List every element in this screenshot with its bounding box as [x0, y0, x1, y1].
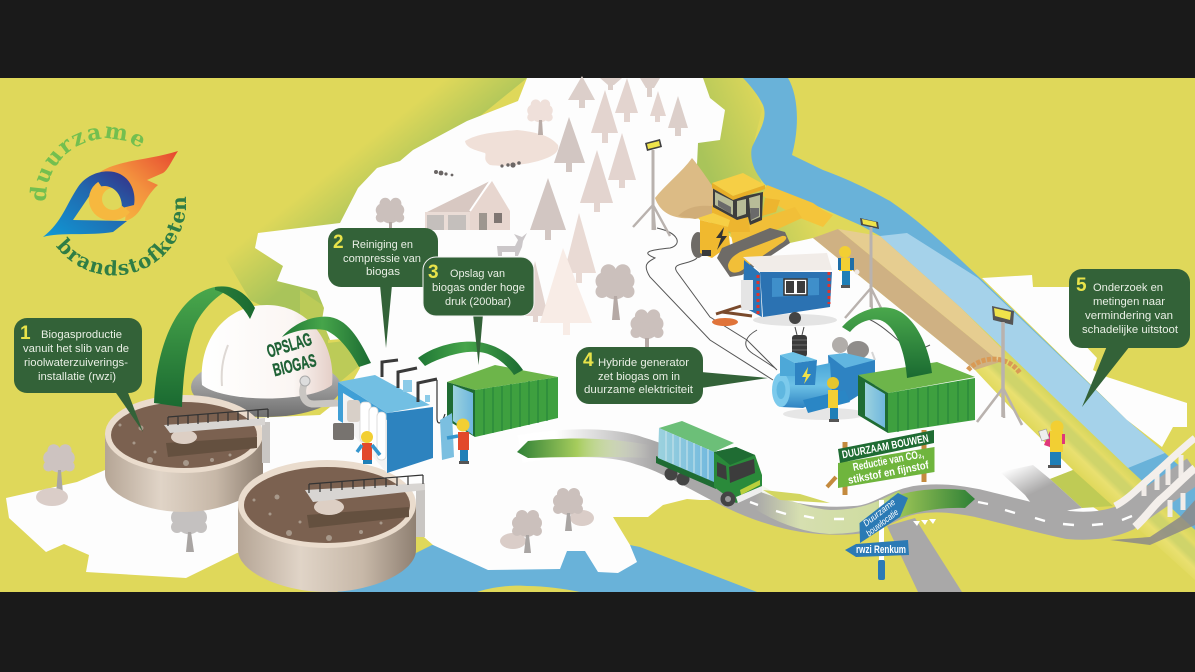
land east of river: [982, 275, 1187, 447]
callout 3: Opslag van: [450, 268, 505, 280]
cabin wheel: [789, 312, 801, 324]
rollers: [832, 337, 848, 353]
logs: [716, 306, 752, 316]
hybrid generator: [772, 327, 875, 420]
generator container: [858, 362, 975, 433]
sign posts: [845, 430, 924, 495]
road bridge: [1110, 438, 1195, 545]
truck grille: [740, 480, 760, 495]
callout 5: vermindering van: [1085, 310, 1173, 322]
callout 4: Hybride generator: [598, 357, 689, 369]
open door leaf: [440, 413, 454, 460]
worker 4: [827, 377, 839, 422]
logo ring: [97, 183, 129, 215]
callout 2: biogas: [366, 266, 401, 278]
callout 4: [576, 347, 768, 404]
callout 5: metingen naar: [1093, 296, 1165, 308]
cabin front: [760, 272, 832, 317]
truck container side: [658, 428, 714, 482]
digger body front: [700, 220, 730, 258]
green arrow 3: [418, 342, 523, 375]
sign text: Reductie van CO₂,: [852, 448, 925, 474]
green arrow 2: [282, 317, 371, 367]
storage container: [440, 365, 558, 460]
river north-east: [743, 78, 1195, 530]
cylinder end: [772, 373, 790, 407]
callout 2: 2: [333, 232, 344, 253]
transformer top: [780, 352, 817, 363]
green arrow on road, left: [517, 438, 650, 458]
signpost: rwzi Renkum: [856, 544, 906, 556]
worker 2: [447, 418, 470, 464]
unit cylinders: [360, 402, 371, 442]
biogas storage dome: [191, 305, 341, 417]
site cabin: [712, 253, 837, 326]
container top: [858, 362, 975, 393]
cows: [434, 161, 521, 176]
machine base: [803, 390, 850, 413]
sign text: stikstof en fijnstof: [847, 459, 930, 487]
cables: [646, 228, 930, 380]
floodlight 3: [977, 306, 1022, 425]
cabin roof: [743, 253, 832, 272]
callout 3: 3: [428, 262, 439, 283]
digger: [691, 173, 833, 277]
tank 1 scraper: [166, 437, 257, 457]
researcher: [1039, 420, 1065, 468]
tank 2 walkway: [400, 487, 425, 537]
deer: [497, 233, 527, 256]
dike dark tan: [813, 229, 1000, 370]
truck container top: [659, 421, 734, 452]
callout 1: Biogasproductie: [41, 329, 122, 341]
black top band: [0, 0, 1195, 78]
background landscape: [36, 76, 688, 553]
signpost pole: [879, 500, 884, 560]
rear box top: [828, 353, 875, 370]
green arrow 4: [842, 307, 932, 378]
transformer bolt: [802, 367, 811, 384]
farm: [425, 180, 510, 230]
callout 1: rioolwaterzuiverings-: [24, 357, 128, 369]
digger body top: [698, 213, 730, 227]
direction sign: rwzi: [845, 540, 909, 557]
bottom water: [337, 545, 757, 592]
callout 3: [423, 257, 534, 365]
dike light tan: [838, 229, 1003, 362]
container long side: [475, 377, 558, 437]
digger cab base: [712, 205, 750, 232]
dome label: OPSLAG: [264, 329, 314, 362]
truck wheels rear: [664, 468, 678, 480]
digger cab frame: [713, 188, 763, 225]
callout 1: 1: [20, 323, 31, 344]
unit interior: [338, 382, 387, 473]
sign upper panel: [838, 430, 934, 463]
generator shadow: [783, 408, 867, 420]
truck cab: [714, 447, 762, 503]
tank 2 hub: [314, 499, 344, 515]
callout 4: duurzame elektriciteit: [584, 384, 693, 396]
cabin side: [743, 260, 762, 317]
unit right side: [387, 407, 433, 473]
hose: [303, 382, 338, 404]
transformer left: [780, 355, 795, 376]
worker 1: [357, 431, 380, 464]
sign text: DUURZAAM BOUWEN: [841, 433, 930, 461]
compressor: [333, 423, 354, 440]
callout 4: zet biogas om in: [598, 371, 680, 383]
truck windscreen: [729, 459, 755, 483]
logo text top: duurzame: [30, 126, 144, 201]
black bottom band: [0, 592, 1195, 672]
floodlight 1: [633, 139, 670, 236]
logo: [30, 126, 186, 276]
shallow water strip: [880, 233, 1165, 468]
signpost: Duurzame: [861, 497, 897, 528]
callout 1: vanuit het slib van de: [23, 343, 129, 355]
callout 2: [328, 228, 438, 348]
transformer front: [795, 360, 817, 385]
cable: [437, 380, 445, 423]
callout 3: biogas onder hoge: [432, 282, 525, 294]
digger hitch: [702, 250, 711, 256]
coil: [792, 335, 807, 357]
container long side: [888, 378, 975, 433]
callout 3: druk (200bar): [445, 296, 511, 308]
tank 2 sludge bubbles: [252, 494, 382, 541]
digger connector: [762, 198, 780, 216]
sign text: [841, 433, 930, 487]
container door face: [447, 382, 475, 437]
unit top: [338, 375, 430, 413]
pond: [465, 130, 558, 166]
gallows: [382, 360, 437, 402]
wedge beside the road: [1050, 470, 1113, 508]
direction sign: building site: [860, 493, 908, 543]
floodlight 2: [845, 218, 882, 318]
callout 5: schadelijke uitstoot: [1082, 324, 1178, 336]
dome label: BIOGAS: [271, 350, 318, 380]
callout 5: [1069, 269, 1190, 407]
green arrow on road, right: [890, 489, 975, 522]
worker 3: [838, 246, 860, 288]
digger upper arm: [762, 185, 833, 227]
map background: [0, 78, 1195, 592]
callout 1: installatie (rwzi): [38, 371, 116, 383]
digger rear track: [691, 232, 705, 258]
callout 2: compressie van: [343, 253, 421, 265]
signpost: bouwlocatie: [864, 507, 900, 538]
settling tank 1: [105, 395, 270, 512]
central white land: [6, 78, 1113, 578]
gas bottles: [403, 380, 430, 402]
truck: [656, 421, 762, 506]
main cylinder: [781, 363, 832, 408]
green arrow 1: [154, 286, 255, 407]
cabin stripes: [758, 272, 829, 315]
unit blue frame: [338, 382, 387, 423]
cabin window: [784, 279, 807, 295]
logo ring front: [94, 186, 126, 215]
callout 1: [14, 318, 143, 432]
truck front wheel: [720, 492, 736, 506]
truck bumper: [736, 486, 762, 503]
callout 5: 5: [1076, 275, 1087, 296]
dike strips: [960, 307, 1195, 580]
truck roof: [714, 447, 755, 465]
signpost: [845, 493, 909, 580]
container door face: [858, 375, 888, 433]
digger roof: [712, 173, 765, 196]
callout 2: Reiniging en: [352, 239, 413, 251]
digger windows: [715, 192, 760, 221]
container top: [447, 365, 558, 390]
tank 2 scraper: [307, 507, 409, 528]
tank 1 hub: [171, 430, 197, 444]
sign: duurzaam bouwen: [827, 430, 934, 495]
logo flame: [100, 151, 178, 221]
digger lower arm: [730, 207, 802, 245]
callout 4: 4: [583, 350, 594, 371]
conifer forest: [525, 76, 688, 335]
digger track: [717, 228, 790, 277]
truck chassis: [656, 456, 716, 489]
sign lower panel: [838, 447, 934, 488]
dome label: [264, 329, 318, 380]
junction marks: [913, 519, 936, 526]
logo blue ribbon: [43, 171, 134, 237]
logo text bottom: brandstofketen: [56, 196, 186, 276]
road markings: [750, 502, 1132, 525]
rear box face: [828, 355, 875, 402]
tank 1 sludge bubbles: [118, 424, 232, 466]
settling tank 2: [238, 460, 425, 592]
sand pile: [655, 158, 715, 219]
tank 1 walkway: [245, 422, 270, 463]
callout 5: Onderzoek en: [1093, 282, 1163, 294]
brick bridge: [968, 359, 1020, 373]
cabin shadow: [753, 314, 837, 326]
bottom island: [477, 586, 580, 592]
round trees: [36, 99, 664, 553]
purification unit: [333, 360, 445, 473]
road: [520, 443, 1195, 592]
digger bolt: [716, 227, 727, 250]
